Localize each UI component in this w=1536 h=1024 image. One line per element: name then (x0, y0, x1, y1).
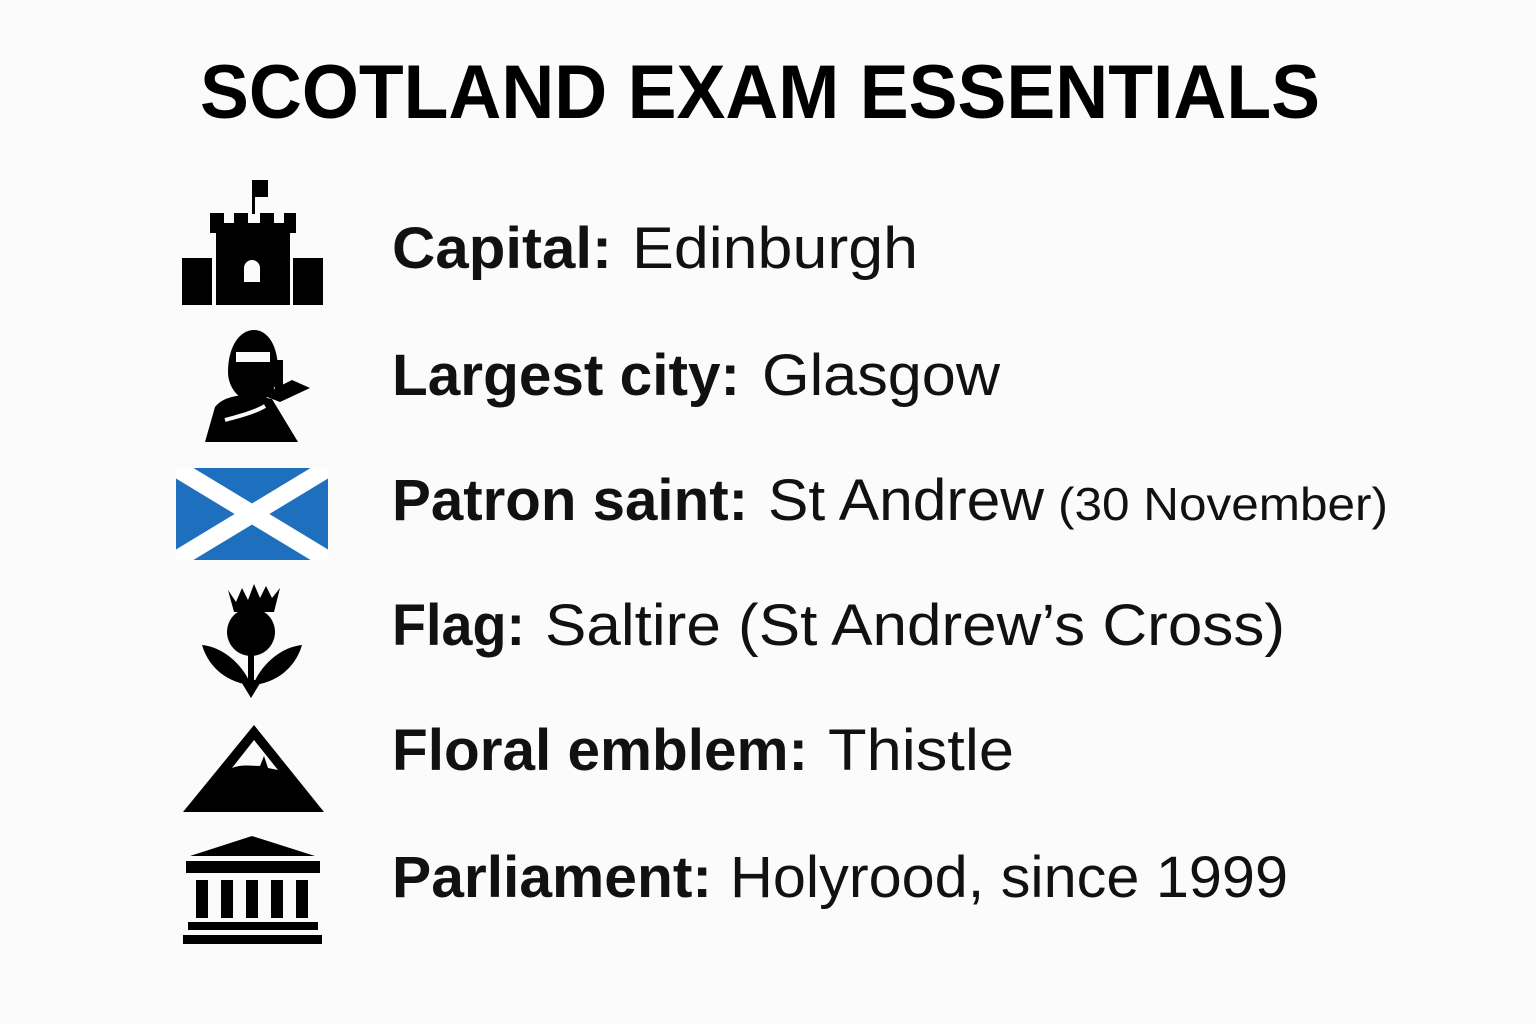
text: flag: Flag: (392, 593, 525, 658)
text: floral emblem: Floral emblem: (392, 718, 808, 783)
text: flag: Saltire (St Andrew’s Cross) (545, 593, 1285, 658)
text: capital (392, 216, 918, 281)
icon: castle (182, 180, 323, 305)
text: parliament (392, 845, 1288, 910)
text: floral emblem: Thistle (828, 718, 1014, 783)
title: SCOTLAND EXAM ESSENTIALS (200, 50, 1320, 135)
text: capital: Capital: (392, 216, 612, 281)
text: floral emblem (392, 718, 1014, 783)
text: patron saint: St Andrew (768, 468, 1045, 533)
text: parliament: Parliament: (392, 845, 712, 910)
text: patron saint: (30 November) (1058, 478, 1388, 530)
icon: saltire flag (176, 468, 328, 560)
text: largest city (392, 343, 1001, 408)
text: largest city: Largest city: (392, 343, 740, 408)
text: parliament: Holyrood, since 1999 (730, 845, 1288, 910)
text: largest city: Glasgow (762, 343, 1001, 408)
icon: parliament (183, 836, 322, 944)
icon: mountain (183, 725, 324, 812)
icon: piper (205, 330, 310, 442)
icon: thistle (202, 584, 302, 698)
text: patron saint: Patron saint: (392, 468, 748, 533)
text: patron saint (392, 468, 1388, 533)
text: capital: Edinburgh (632, 216, 918, 281)
